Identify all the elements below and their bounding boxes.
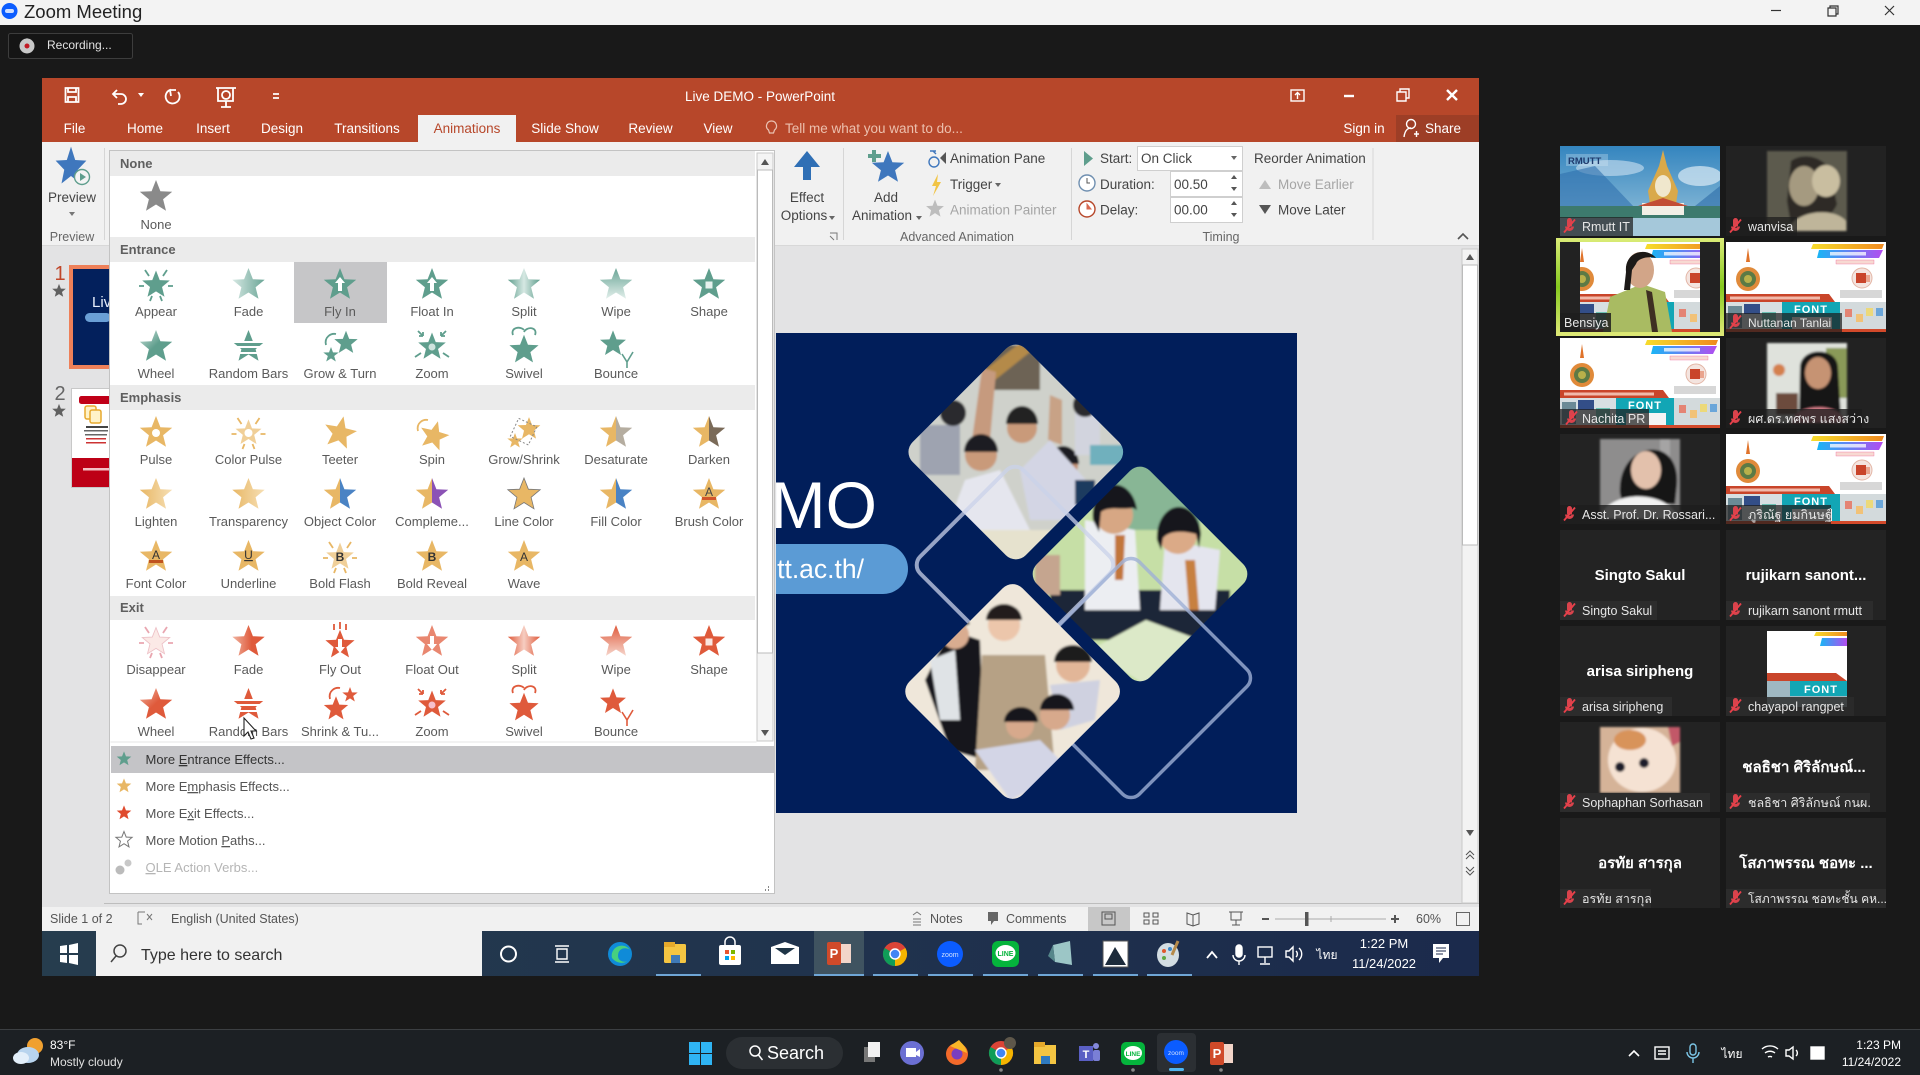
tile: Thai name chonthicha: ชลธิชา ศิริลักษณ์ กนผ. xyxy=(1748,796,1871,810)
participant gallery xyxy=(1558,146,1887,908)
menu: more motion paths: More Motion Paths... xyxy=(146,833,265,848)
effect: Disappear: Disappear xyxy=(126,662,186,677)
icon: meet xyxy=(900,1041,924,1065)
animation gallery dropdown xyxy=(110,150,774,894)
tile: Nachita PR: Nachita PR xyxy=(1582,412,1645,426)
slide thumbnails pane xyxy=(52,263,112,488)
weather widget: Mostly cloudy xyxy=(50,1055,123,1069)
effect: Spin: Spin xyxy=(419,452,445,467)
search box: Type here to search xyxy=(141,947,282,964)
tile: Thai name chonthicha: ชลธิชา ศิริลักษณ์... xyxy=(1742,758,1866,776)
tile: Thai name orathai xyxy=(1560,818,1720,908)
icon: paint xyxy=(1147,941,1192,976)
tile: Thai professor name: ผศ.ดร.ทศพร แสงสว่าง xyxy=(1748,412,1869,426)
clock xyxy=(1842,1038,1901,1069)
effect: Appear: Appear xyxy=(135,304,178,319)
system tray xyxy=(1629,1044,1824,1063)
effect: Font Color: A xyxy=(152,548,160,562)
cortana and task view xyxy=(501,946,569,962)
preview button xyxy=(48,147,96,244)
effect: Split xyxy=(508,625,540,677)
effect: Fly In: Fly In xyxy=(324,304,356,319)
windows 10 taskbar xyxy=(42,931,1479,976)
effect: Pulse: Pulse xyxy=(140,452,172,467)
effect: Shape xyxy=(690,268,728,319)
effect: Shape xyxy=(690,625,728,677)
windows 10 taskbar: ไทย xyxy=(1316,948,1337,962)
tile: Rmutt IT: Rmutt IT xyxy=(1582,220,1630,234)
effect: Split: Split xyxy=(511,304,537,319)
tile: Thai professor name xyxy=(1726,338,1886,428)
timing controls: 00.50 xyxy=(1174,177,1208,192)
icon: powerpoint active xyxy=(814,931,864,976)
effect: Darken: Darken xyxy=(688,452,730,467)
tile: arisa siripheng: arisa siripheng xyxy=(1587,663,1693,680)
notification icon xyxy=(1433,944,1449,963)
timing controls: 00.00 xyxy=(1174,202,1208,218)
effect: Darken xyxy=(688,416,730,467)
effect: Random Bars xyxy=(209,330,289,381)
effect: Wipe xyxy=(600,625,632,677)
windows logo xyxy=(60,943,78,965)
tile: rujikarn: rujikarn sanont rmutt xyxy=(1748,604,1862,618)
tile: Singto Sakul: Singto Sakul xyxy=(1582,604,1652,618)
tile: rujikarn xyxy=(1726,530,1886,620)
tile: Thai name orathai: อรทัย สารกุล xyxy=(1598,855,1682,873)
timing controls: Reorder Animation xyxy=(1254,151,1366,166)
icon: crystal app xyxy=(1038,941,1083,976)
section: entrance: Entrance xyxy=(120,242,176,257)
icon: task view xyxy=(864,1042,880,1062)
status bar xyxy=(42,907,1479,931)
active speaker border xyxy=(1558,240,1722,334)
windows 11 taskbar xyxy=(0,1029,1920,1075)
effect: Bold Flash: B xyxy=(336,550,345,564)
url pill: tt.ac.th/ xyxy=(777,554,865,584)
search box xyxy=(96,931,482,976)
effect: Brush Color: A xyxy=(705,485,713,499)
clock: 1:23 PM xyxy=(1856,1038,1901,1052)
slide title fragment: MO xyxy=(771,468,877,542)
menu: more entrance effects: More Entrance Effects... xyxy=(146,752,285,767)
effect: Underline: Underline xyxy=(221,576,276,591)
animation pane group: Animation Pane xyxy=(950,151,1045,166)
tile: Rmutt IT xyxy=(1560,146,1720,236)
icon: store xyxy=(719,937,741,965)
effect: Random Bars xyxy=(209,688,289,739)
ribbon tabs: Review xyxy=(628,121,673,136)
animation pane group: Advanced Animation xyxy=(900,230,1014,244)
effect: Brush Color xyxy=(675,478,744,529)
effect: Swivel: Swivel xyxy=(505,366,543,381)
timing controls: Timing xyxy=(1202,230,1240,244)
effect: Fly Out: Fly Out xyxy=(319,662,361,677)
menu: ole action verbs: OLE Action Verbs... xyxy=(146,860,258,875)
sign in and share: Sign in xyxy=(1343,121,1385,136)
effect: Appear xyxy=(135,270,178,319)
effect: Zoom xyxy=(415,331,449,381)
effect: Bounce: Bounce xyxy=(594,366,638,381)
effect: Swivel xyxy=(505,686,543,739)
thumbnail 2: 2 xyxy=(54,383,66,405)
tile: Thai name chonthicha xyxy=(1726,722,1886,812)
effect: Bold Reveal: Bold Reveal xyxy=(397,576,467,591)
effect: Disappear xyxy=(126,627,186,677)
icon: line: LINE xyxy=(998,951,1014,958)
preview button: Preview xyxy=(50,230,95,244)
fly in highlight xyxy=(294,262,387,323)
icon: mail xyxy=(771,942,799,964)
tile: Thai name with share: ภูริณัฐ ยมกินษฐ์ xyxy=(1748,508,1832,523)
thumbnail 2 xyxy=(52,383,112,488)
ribbon xyxy=(42,142,1479,246)
highlighted row: more entrance effects xyxy=(111,746,774,773)
icon: edge xyxy=(608,942,632,966)
ribbon tabs: File xyxy=(64,121,85,136)
effect: Random Bars: Random Bars xyxy=(209,366,289,381)
effect: Swivel xyxy=(505,328,543,381)
quick access toolbar xyxy=(66,88,279,107)
effect: Grow/Shrink xyxy=(488,417,560,467)
effect: Complementary: Compleme... xyxy=(395,514,469,529)
icon: zoom active: zoom xyxy=(1168,1050,1184,1057)
collapse ribbon xyxy=(1458,234,1468,239)
effect: Wave xyxy=(508,540,540,591)
effect: Wipe xyxy=(600,268,632,319)
icon: file explorer xyxy=(1034,1042,1056,1064)
ribbon tabs: Transitions xyxy=(334,121,400,136)
icon: powerpoint active: P xyxy=(830,946,839,961)
thumbnail 1 xyxy=(52,263,112,369)
tile: Thai name sopapan: โสภาพรรณ ชอทะชั้น คห... xyxy=(1748,890,1887,906)
effect: Shrink & Turn: Shrink & Tu... xyxy=(301,724,379,739)
ribbon tabs: Animations xyxy=(434,121,501,136)
effect: Fly In xyxy=(324,268,356,319)
tile: chayapol rangpet: FONT xyxy=(1804,684,1838,696)
effect: Random Bars: Random Bars xyxy=(209,724,289,739)
clock: 11/24/2022 xyxy=(1352,956,1416,971)
ribbon tabs: Design xyxy=(261,121,303,136)
timing controls: Delay: xyxy=(1100,202,1138,218)
section: emphasis xyxy=(110,385,755,591)
tile: Nuttanan Tanlai xyxy=(1726,242,1886,332)
section: none: None xyxy=(120,156,152,171)
effect: Grow & Turn: Grow & Turn xyxy=(304,366,376,381)
photo diamond: girls reading xyxy=(1032,466,1248,682)
effect: Font Color xyxy=(126,540,187,591)
zoom title bar xyxy=(0,0,1920,25)
timing controls: Move Later xyxy=(1278,202,1346,218)
powerpoint title bar and tabs xyxy=(42,78,1479,142)
tile: Nachita PR xyxy=(1560,338,1720,428)
windows 11 logo xyxy=(689,1042,712,1065)
section: none xyxy=(110,151,755,232)
tile: Singto Sakul xyxy=(1560,530,1720,620)
icon: zoom xyxy=(928,941,973,976)
effect: Swivel: Swivel xyxy=(505,724,543,739)
effect: Grow & Turn xyxy=(304,331,376,381)
gallery scrollbar xyxy=(757,153,773,741)
clock: 11/24/2022 xyxy=(1842,1055,1901,1069)
outline diamond 2 xyxy=(1007,554,1255,802)
photo diamond: students raising hands xyxy=(908,344,1124,560)
icon: zoom: zoom xyxy=(941,952,959,959)
comments button: Comments xyxy=(1006,912,1066,926)
effect: Shape: Shape xyxy=(690,304,728,319)
tile: chayapol rangpet xyxy=(1726,626,1886,716)
tile: rujikarn: rujikarn sanont... xyxy=(1746,567,1866,584)
clock: 1:22 PM xyxy=(1360,936,1408,951)
mouse cursor xyxy=(244,718,256,739)
tile: chayapol rangpet: chayapol rangpet xyxy=(1748,700,1844,714)
tile: arisa siripheng: arisa siripheng xyxy=(1582,700,1663,714)
menu: more exit effects: More Exit Effects... xyxy=(146,806,254,821)
tile: wanvisa xyxy=(1726,146,1886,236)
zoom title bar: Zoom Meeting xyxy=(24,1,142,22)
timing controls: Move Earlier xyxy=(1278,177,1354,192)
effect: Float Out xyxy=(405,625,459,677)
ribbon tabs: Insert xyxy=(196,121,230,136)
effect: Object Color: Object Color xyxy=(304,514,377,529)
effect: Lighten xyxy=(135,478,177,529)
effect: Bold Flash: Bold Flash xyxy=(309,576,371,591)
powerpoint window xyxy=(42,78,1479,976)
tell me search: Tell me what you want to do... xyxy=(785,121,963,136)
status bar: English (United States) xyxy=(171,912,299,926)
effect: Wheel: Wheel xyxy=(138,366,175,381)
icon: line: LINE xyxy=(1126,1051,1141,1058)
tile: Thai name orathai: อรทัย สารกุล xyxy=(1582,892,1652,907)
notes button: Notes xyxy=(930,912,963,926)
icon: teams: T xyxy=(1083,1049,1090,1061)
tile: Bensiya: Bensiya xyxy=(1564,316,1609,330)
effect: Fly Out xyxy=(319,622,361,677)
effect: Float In xyxy=(410,268,454,319)
more effects menu xyxy=(110,742,774,890)
effect: Split xyxy=(508,268,540,319)
effect: Complementary xyxy=(395,478,469,529)
effect: Fade xyxy=(232,625,265,677)
icon: photos xyxy=(1093,941,1138,976)
effect: Transparency: Transparency xyxy=(209,514,288,529)
system tray xyxy=(1207,945,1302,965)
tile: Nuttanan Tanlai: Nuttanan Tanlai xyxy=(1748,316,1831,330)
timing controls: On Click xyxy=(1141,151,1192,166)
preview button: Preview xyxy=(48,190,96,205)
effect options: Options xyxy=(781,208,828,223)
icon: chrome xyxy=(873,942,918,976)
effect: Float In: Float In xyxy=(410,304,454,319)
icon: chrome with avatar xyxy=(989,1037,1016,1072)
tile: Sophaphan Sorhasan: Sophaphan Sorhasan xyxy=(1582,796,1703,810)
effect: Fade: Fade xyxy=(234,662,263,677)
effect: Teeter xyxy=(321,413,359,467)
tile: wanvisa: wanvisa xyxy=(1747,220,1793,234)
effect: Zoom: Zoom xyxy=(415,724,449,739)
effect: Object Color xyxy=(304,478,377,529)
timing controls xyxy=(1079,146,1366,244)
effect: Pulse xyxy=(140,416,172,467)
weather widget xyxy=(13,1038,123,1069)
zoom slider xyxy=(1262,912,1470,926)
effect: Lighten: Lighten xyxy=(135,514,177,529)
search pill xyxy=(726,1037,843,1069)
effect: Teeter: Teeter xyxy=(322,452,359,467)
icon: teams xyxy=(1079,1043,1100,1061)
section: none: None xyxy=(140,217,172,232)
effect: Grow/Shrink: Grow/Shrink xyxy=(488,452,560,467)
tile: Thai name sopapan xyxy=(1726,818,1887,908)
effect: Bold Flash xyxy=(309,542,371,591)
effect: Wheel xyxy=(138,688,175,739)
slide canvas xyxy=(776,333,1297,813)
effect: Wheel: Wheel xyxy=(138,724,175,739)
icon: line xyxy=(983,941,1028,976)
section: exit xyxy=(110,596,755,739)
effect: Transparency xyxy=(209,478,288,529)
tile: Thai name sopapan: โสภาพรรณ ชอทะ ... xyxy=(1738,853,1873,872)
outline diamond 1 xyxy=(912,462,1118,668)
animation pane group xyxy=(900,151,1057,244)
effect: Font Color: Font Color xyxy=(126,576,187,591)
window controls xyxy=(1291,89,1457,101)
sign in and share: Share xyxy=(1425,121,1461,136)
tile: Bensiya xyxy=(1560,242,1720,332)
effect: Wave: A xyxy=(520,550,528,564)
url pill xyxy=(776,544,908,594)
effect: Line Color: Line Color xyxy=(494,514,554,529)
tile: Thai name with share xyxy=(1726,434,1886,524)
effect: Desaturate: Desaturate xyxy=(584,452,648,467)
thumbnail 1: Liv xyxy=(92,294,112,311)
search pill: Search xyxy=(767,1043,824,1063)
effect: Wave: Wave xyxy=(508,576,540,591)
icon: powerpoint: P xyxy=(1213,1046,1222,1061)
edit area scrollbar xyxy=(1462,249,1478,903)
effect: Wipe: Wipe xyxy=(601,304,631,319)
add animation xyxy=(852,150,922,223)
windows 11 taskbar: ไทย xyxy=(1721,1047,1742,1061)
menu: more emphasis effects: More Emphasis Effects... xyxy=(146,779,290,794)
effect options: Effect xyxy=(790,190,824,205)
effect: Split: Split xyxy=(511,662,537,677)
weather widget: 83°F xyxy=(50,1038,75,1052)
edit area xyxy=(42,246,1479,907)
effect: Bounce: Bounce xyxy=(594,724,638,739)
effect: Desaturate xyxy=(584,416,648,467)
tile: Rmutt IT: RMUTT xyxy=(1568,156,1601,167)
status bar: Slide 1 of 2 xyxy=(50,912,113,926)
effect: Bold Reveal xyxy=(397,540,467,591)
window title: Live DEMO - PowerPoint xyxy=(685,89,835,104)
effect: Underline xyxy=(221,540,276,591)
active tab: animations xyxy=(418,115,516,142)
timing controls: Start: xyxy=(1100,151,1132,166)
effect: Fill Color: Fill Color xyxy=(590,514,642,529)
effect: Bold Reveal: B xyxy=(428,550,437,564)
tile: Asst. Prof. Dr. Rossari xyxy=(1560,434,1720,522)
effect: Line Color xyxy=(494,478,554,529)
effect: Shrink & Turn xyxy=(301,687,379,739)
zoom slider: 60% xyxy=(1416,912,1441,926)
effect: Color Pulse xyxy=(215,418,282,467)
effect: Float Out: Float Out xyxy=(405,662,459,677)
effect: Color Pulse: Color Pulse xyxy=(215,452,282,467)
animation pane group: Animation Painter xyxy=(950,202,1057,218)
icon: powerpoint xyxy=(1210,1042,1233,1072)
clock xyxy=(1352,936,1416,971)
tile: arisa siripheng xyxy=(1560,626,1720,716)
effect: Fill Color xyxy=(590,478,642,529)
effect: Wheel xyxy=(138,330,175,381)
effect: Shape: Shape xyxy=(690,662,728,677)
section: emphasis: Emphasis xyxy=(120,390,181,405)
recording badge xyxy=(8,34,132,58)
section: entrance xyxy=(110,237,755,381)
icon: file explorer xyxy=(656,942,701,976)
add animation: Add xyxy=(874,190,898,205)
tile: Sophaphan Sorhasan xyxy=(1560,722,1720,812)
effect: Fade: Fade xyxy=(234,304,263,319)
ribbon tabs: View xyxy=(703,121,733,136)
effect: Brush Color: Brush Color xyxy=(675,514,744,529)
effect: Bounce xyxy=(594,330,638,381)
effect: Zoom: Zoom xyxy=(415,366,449,381)
ribbon tabs: Slide Show xyxy=(531,121,599,136)
tile: Singto Sakul: Singto Sakul xyxy=(1595,567,1685,584)
thumbnail 1: 1 xyxy=(54,263,66,285)
tile: Asst. Prof. Dr. Rossari: Asst. Prof. Dr. Rossari... xyxy=(1582,508,1715,522)
effect: Zoom xyxy=(415,689,449,739)
effect: Wipe: Wipe xyxy=(601,662,631,677)
animation pane group: Trigger xyxy=(950,177,993,192)
photo diamond: teacher with students xyxy=(900,580,1125,805)
effect options xyxy=(781,151,837,240)
recording badge: Recording... xyxy=(47,38,112,52)
sign in and share xyxy=(1343,115,1479,142)
icon: firefox xyxy=(946,1040,968,1065)
effect: Bounce xyxy=(594,688,638,739)
view buttons xyxy=(1088,907,1243,931)
section: exit: Exit xyxy=(120,600,145,615)
icon: zoom active xyxy=(1157,1033,1196,1072)
ribbon tabs xyxy=(64,121,733,136)
ribbon tabs: Home xyxy=(127,121,163,136)
effect: Spin xyxy=(417,417,452,467)
add animation: Animation xyxy=(852,208,912,223)
icon: line xyxy=(1121,1042,1145,1072)
notes button xyxy=(913,912,963,926)
effect: Fade xyxy=(232,268,265,319)
timing controls: Duration: xyxy=(1100,177,1155,192)
effect: Underline: U xyxy=(244,548,253,562)
